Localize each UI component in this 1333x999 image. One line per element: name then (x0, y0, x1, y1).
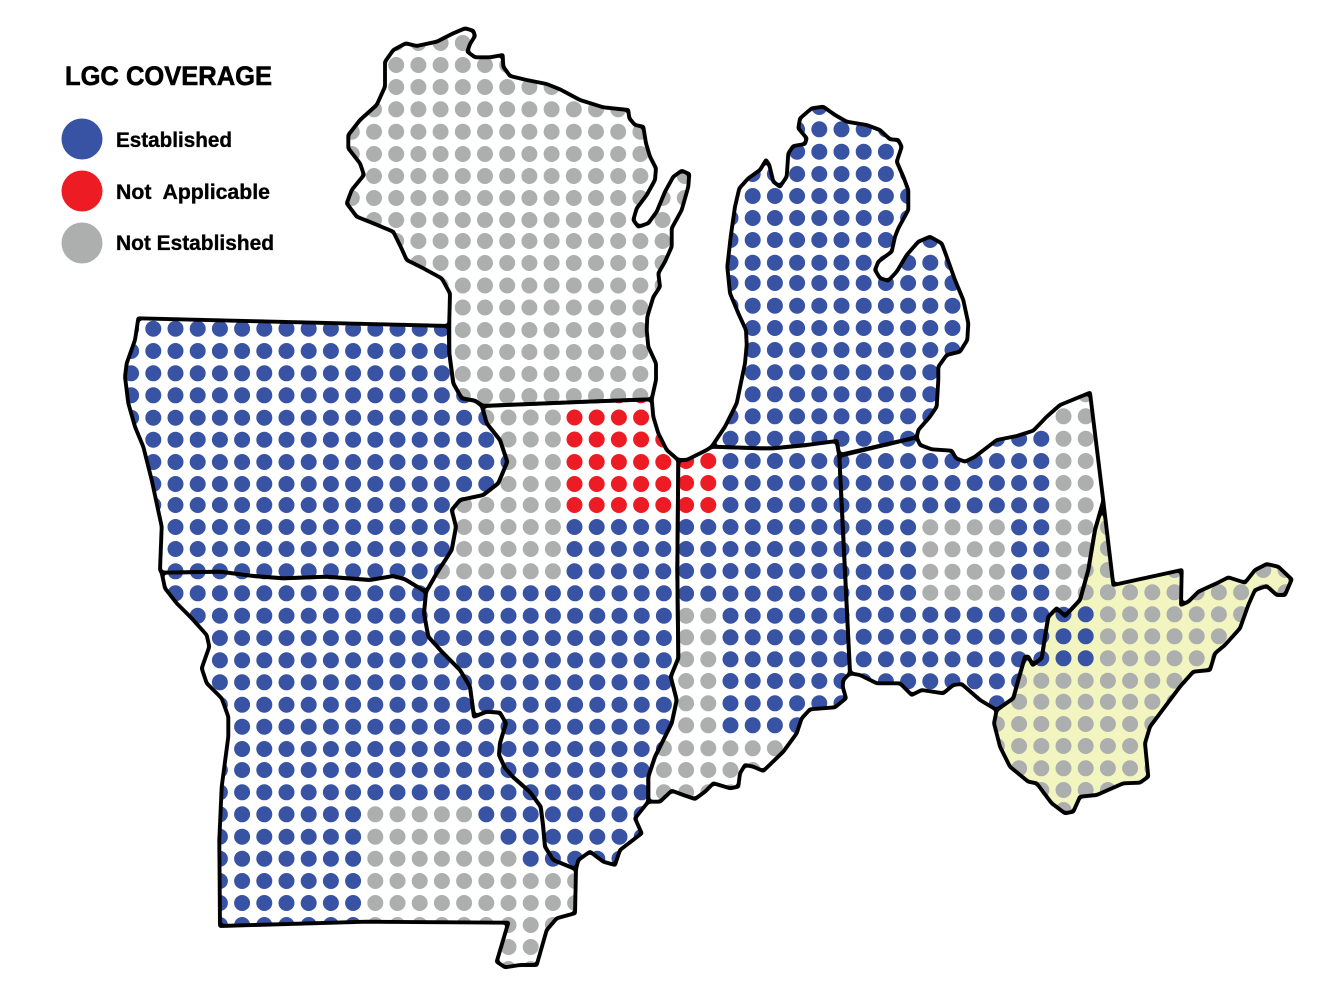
outline: Missouri (162, 572, 576, 967)
legend item: not applicable: Not Applicable (116, 181, 270, 204)
legend item: not established (62, 222, 274, 264)
dots: West Virginia (996, 520, 1288, 811)
dots: Indiana (642, 461, 842, 792)
legend title: LGC COVERAGE (65, 61, 272, 91)
West Virginia fill (994, 501, 1292, 813)
legend item: established (62, 118, 232, 160)
dots: Illinois (420, 395, 665, 859)
legend item: established: Established (116, 129, 232, 152)
outline: Iowa (125, 318, 507, 592)
legend item: not applicable (62, 170, 270, 212)
dots: Michigan (708, 107, 976, 439)
outline: Indiana (648, 441, 850, 802)
dots: Wisconsin (352, 43, 686, 396)
dots: Iowa (131, 329, 510, 593)
outline: Illinois (424, 399, 678, 869)
outline: Wisconsin (347, 28, 689, 406)
legend (62, 61, 274, 264)
outline: Ohio (839, 393, 1103, 710)
outline: West Virginia (994, 501, 1292, 813)
legend item: not established: Not Established (116, 232, 274, 255)
dots: Ohio (842, 394, 1087, 703)
outline: Michigan (712, 107, 968, 455)
dots: Missouri (153, 571, 576, 969)
